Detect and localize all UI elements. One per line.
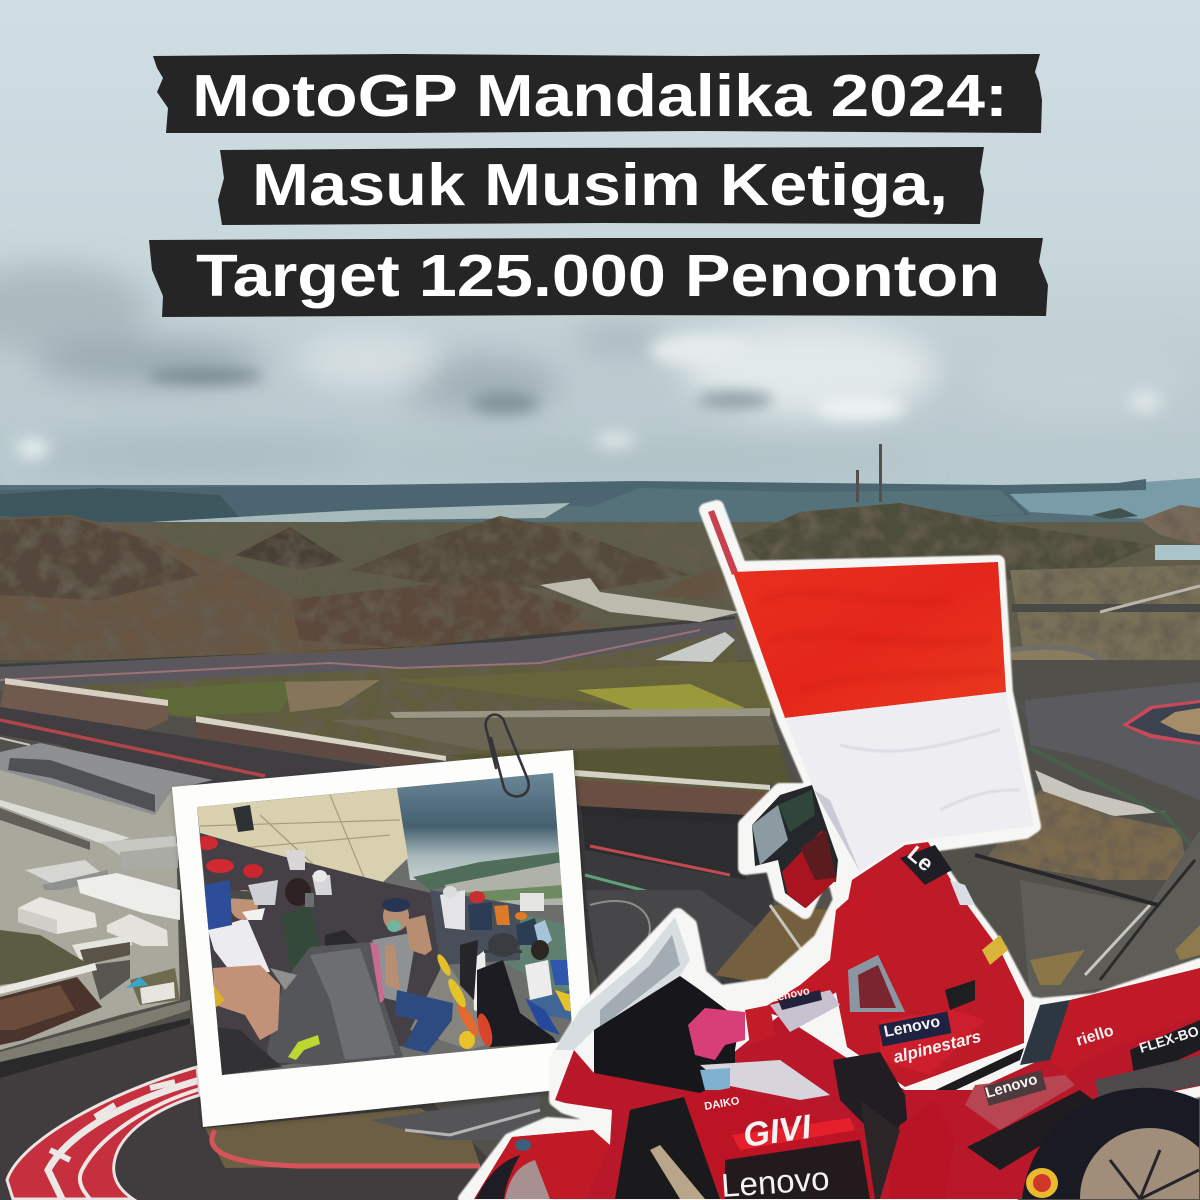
photo card — [172, 750, 596, 1127]
background: circuit infield — [0, 578, 1200, 1200]
motorcycle: fairing — [474, 917, 1200, 1199]
background: sky with clouds — [0, 256, 1200, 485]
title strip 1: MotoGP Mandalika 2024: — [192, 63, 1008, 129]
background: sea and distant hills — [0, 444, 1200, 522]
title strips — [149, 54, 1048, 317]
pink glove — [688, 1008, 745, 1060]
white shirt man right — [525, 960, 553, 1000]
green shirt woman — [282, 907, 320, 968]
grey concrete floor — [410, 966, 486, 1050]
background: near hills — [0, 503, 1200, 660]
sponsor labels: riello — [1074, 1022, 1116, 1050]
hooded grey raincoat — [267, 942, 403, 1066]
background: coastal bay and road at right — [1010, 545, 1200, 660]
helmet — [752, 785, 838, 908]
main straight behind the grass — [0, 618, 735, 690]
seats — [459, 1031, 475, 1049]
right hand track — [1025, 682, 1200, 800]
title strip 3: Target 125.000 Penonton — [196, 243, 1000, 309]
dark bottom left — [217, 1027, 282, 1075]
legs — [213, 965, 280, 1040]
flag: white stripe — [785, 692, 1034, 872]
black shirt man — [474, 950, 486, 1012]
title strip 2 — [218, 147, 984, 225]
photo: spectators at the grandstand — [190, 770, 590, 1080]
icon: paper clip — [486, 715, 529, 796]
small grandstand — [0, 963, 190, 1080]
front wheel — [476, 1130, 610, 1199]
shell logo — [1026, 1168, 1058, 1198]
rear wheel — [1022, 1088, 1199, 1199]
white shirt man — [208, 918, 270, 975]
sponsor labels: Lenovo — [983, 1071, 1039, 1102]
sponsor labels: FLEX-BO — [1137, 1023, 1200, 1056]
caps and jerseys — [200, 836, 218, 850]
central dark track — [575, 805, 780, 990]
sponsor labels: DAIKO — [703, 1095, 741, 1113]
white sticker outline — [465, 507, 1200, 1199]
sponsor labels: Lenovo — [770, 985, 811, 1005]
rider body — [760, 842, 1024, 1095]
sponsor labels: Lenovo — [883, 1013, 942, 1041]
dark cockpit — [594, 976, 740, 1093]
flag pole — [708, 510, 738, 575]
motorcycle rider with flag — [465, 507, 1200, 1200]
paddock buildings — [0, 743, 213, 1050]
sponsor labels: GIVI — [741, 1108, 815, 1155]
title strip 2: Masuk Musim Ketiga, — [252, 152, 948, 218]
sponsor labels: alpinestars — [891, 1027, 983, 1067]
black glove and knee — [833, 1052, 908, 1130]
windscreen — [555, 917, 690, 1050]
title strip 3 — [149, 238, 1048, 317]
title strip 1 — [153, 54, 1042, 133]
front fairing — [720, 1088, 730, 1090]
flag: red stripe — [733, 562, 1006, 718]
pit straight — [0, 707, 383, 785]
grandstands — [0, 678, 770, 825]
grey shirt man — [372, 934, 414, 1001]
crowd back right — [504, 916, 570, 998]
exhaust area — [967, 1090, 1100, 1170]
sponsor labels — [703, 841, 1200, 1200]
front fork — [615, 1097, 720, 1199]
seat and tail — [1020, 1000, 1070, 1065]
red and white corner kerb — [0, 1024, 540, 1200]
sponsor labels: Le — [903, 841, 939, 876]
